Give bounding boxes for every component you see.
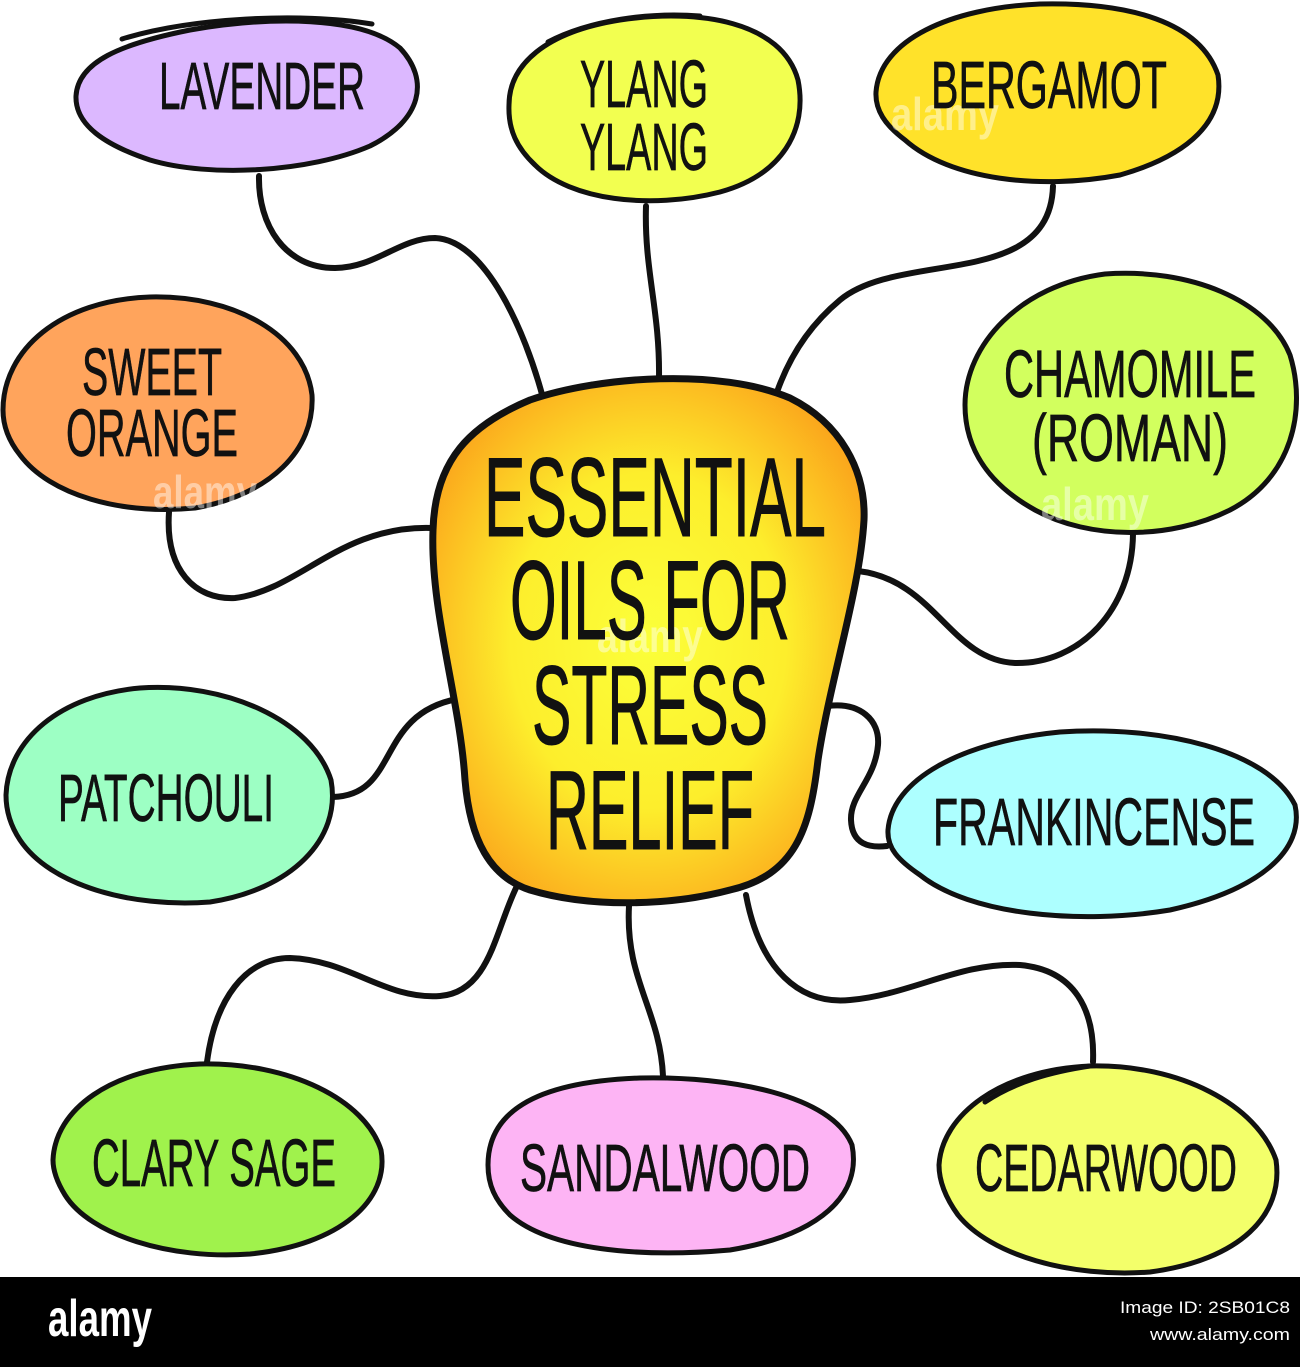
node: clary sage: CLARY SAGE	[92, 1126, 336, 1201]
connector: ylang ylang to centre	[646, 206, 659, 378]
node: ylang ylang: YLANG	[580, 47, 708, 122]
central topic: ESSENTIAL	[484, 435, 826, 560]
connector: bergamot to centre	[777, 186, 1053, 392]
central topic: OILS FOR	[510, 538, 790, 663]
node: bergamot	[876, 4, 1219, 182]
connector: patchouli to centre	[333, 699, 457, 797]
node: frankincense	[888, 731, 1296, 917]
node: patchouli	[6, 687, 332, 903]
node: clary sage	[53, 1064, 382, 1255]
node: sweet orange	[3, 297, 312, 518]
connector: sweet orange to centre	[169, 512, 432, 598]
central topic	[433, 379, 864, 903]
node: bergamot: alamy	[891, 88, 999, 140]
node: ylang ylang: YLANG	[580, 110, 708, 185]
connector: sandalwood to centre	[629, 906, 663, 1076]
node: sweet orange: ORANGE	[66, 396, 238, 471]
node: lavender: LAVENDER	[159, 49, 365, 124]
node: lavender	[76, 18, 417, 170]
central topic: STRESS	[532, 643, 768, 768]
central topic: alamy	[597, 610, 703, 662]
node: ylang ylang	[509, 15, 800, 201]
connector: chamomile to centre	[858, 534, 1133, 663]
footer image id: Image ID: 2SB01C8	[1120, 1298, 1290, 1317]
node: chamomile (roman): alamy	[1041, 478, 1149, 530]
connector: frankincense to centre	[828, 705, 887, 847]
footer url: www.alamy.com	[1149, 1325, 1290, 1344]
footer bar	[0, 1277, 1300, 1367]
node: chamomile (roman)	[965, 273, 1297, 532]
connector: clary sage to centre	[207, 886, 517, 1062]
central topic: RELIEF	[546, 748, 754, 873]
node: sweet orange: SWEET	[82, 335, 222, 410]
node: sweet orange: alamy	[153, 466, 257, 518]
node: patchouli: PATCHOULI	[58, 761, 274, 836]
connector: cedarwood to centre	[746, 895, 1093, 1062]
node: cedarwood	[939, 1066, 1277, 1273]
connector: lavender to centre	[259, 176, 543, 398]
node: sandalwood	[488, 1078, 853, 1253]
footer logo: alamy	[48, 1290, 152, 1348]
node: sandalwood: SANDALWOOD	[520, 1131, 810, 1206]
